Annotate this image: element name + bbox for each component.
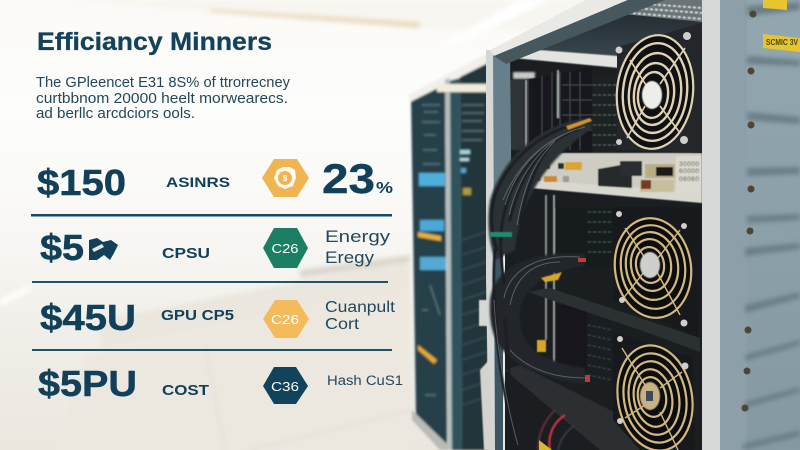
icon: navy hexagon: C36 (271, 379, 299, 394)
lower boards (546, 195, 615, 380)
red cables bottom (538, 410, 575, 450)
caption (325, 299, 396, 333)
row 2: CPSU (40, 227, 391, 268)
shelf 1 with ports: 60000 (679, 168, 699, 175)
intro paragraph: ad berllc arcdciors ools. (36, 106, 195, 122)
rack post mid (486, 48, 512, 250)
fan unit 3 (609, 332, 701, 450)
icon: orange hexagon (263, 300, 309, 338)
title: Efficiancy Minners (37, 28, 272, 56)
shelf 1 with ports: 08060 (679, 176, 699, 183)
value: $5 (40, 227, 84, 268)
caption: Cuanpult (325, 299, 396, 316)
value: $5PU (38, 363, 137, 404)
icon: orange hexagon coin (262, 159, 309, 197)
stat (322, 155, 393, 202)
row 1: ASINRS (37, 155, 393, 203)
shelf 1 with ports: 30000 (679, 161, 699, 168)
intro paragraph: The GPleencet E31 8S% of ttrorrecney (36, 75, 291, 91)
value: $150 (37, 162, 126, 203)
label: COST (162, 382, 209, 399)
icon: green hexagon: C26 (272, 241, 298, 256)
caption: Eregy (325, 248, 375, 267)
top beam (490, 0, 628, 56)
caption: Cort (325, 316, 360, 333)
intro paragraph (36, 75, 291, 122)
ceiling mesh (605, 0, 702, 22)
fan unit 2 (608, 207, 700, 337)
far rack (408, 52, 490, 450)
label: warning stickers (763, 0, 800, 52)
caption (325, 227, 391, 267)
row 3: GPU CP5 (40, 297, 396, 338)
icon: orange hexagon coin: $ (283, 174, 288, 183)
icon: navy hexagon (263, 367, 308, 404)
photo: mining rig racks (408, 0, 800, 450)
mid rack interior (505, 0, 702, 450)
stat: % (376, 180, 393, 197)
fan unit 1 (611, 23, 702, 153)
caption: Energy (325, 227, 391, 246)
icon: garbled glyph (89, 238, 118, 260)
value: $45U (40, 297, 136, 338)
label: CPSU (162, 246, 210, 262)
front pillar (702, 0, 720, 450)
boards (510, 68, 618, 153)
icon: orange hexagon: C26 (271, 312, 299, 327)
stat: 23 (322, 155, 375, 202)
caption: Hash CuS1 (327, 373, 403, 388)
label: GPU CP5 (161, 308, 234, 324)
row 4: COST (38, 363, 403, 404)
intro paragraph: curtbbnom 20000 heelt morwearecs. (36, 91, 288, 107)
shelf 1 with ports (528, 153, 702, 203)
side panels (742, 0, 800, 450)
icon: green hexagon (263, 228, 308, 268)
shelf 2 and 3 (528, 288, 700, 352)
label: ASINRS (166, 174, 230, 190)
cables (488, 118, 592, 450)
